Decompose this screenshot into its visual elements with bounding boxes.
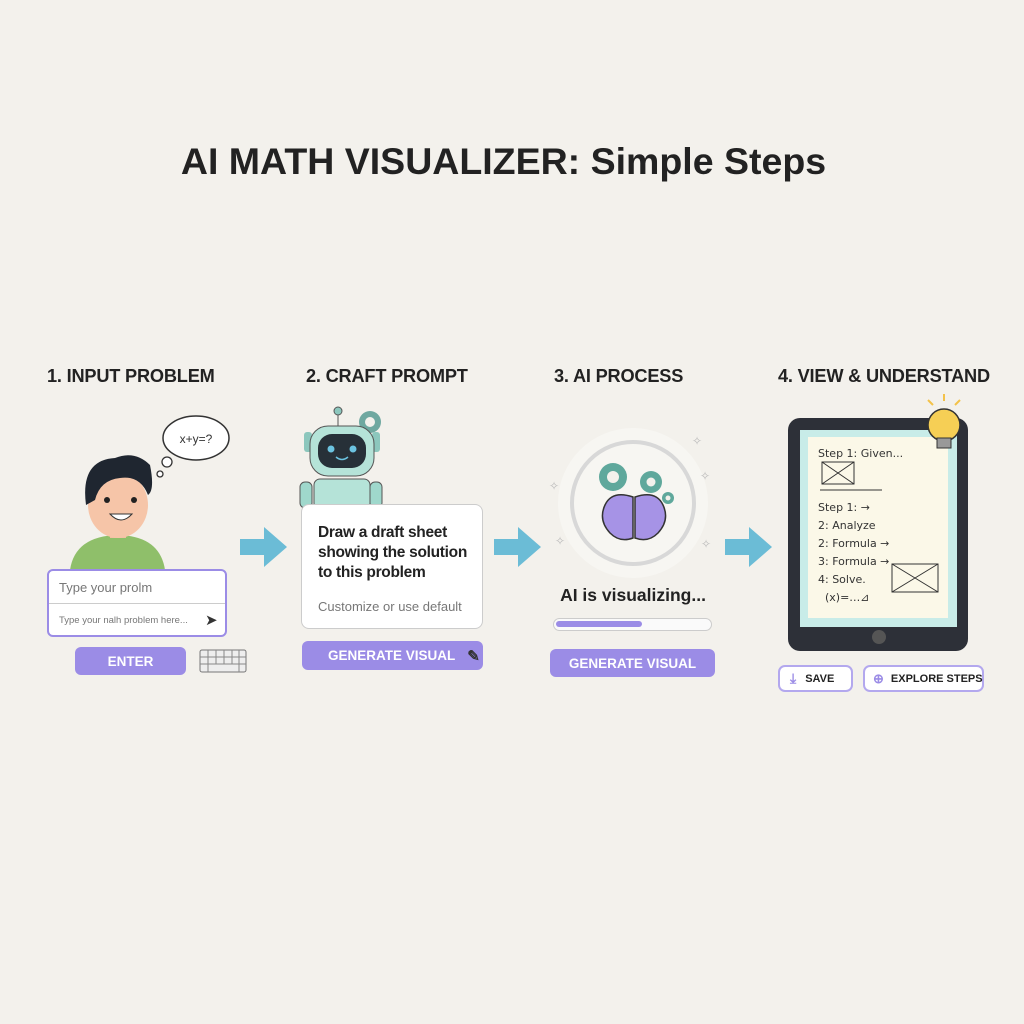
illustration: AI process circle with brain and gears: ✧	[701, 537, 711, 551]
illustration: tablet with solution sheet: (x)=…⊿	[825, 591, 870, 604]
illustration: tablet with solution sheet: 4: Solve.	[818, 573, 866, 586]
button: explore steps: EXPLORE STEPS	[891, 672, 983, 684]
illustration: tablet with solution sheet	[788, 418, 968, 651]
icon: keyboard	[200, 650, 246, 672]
illustration: AI process circle with brain and gears: ✧	[692, 434, 702, 448]
icon: light bulb	[927, 394, 961, 448]
progress bar	[553, 618, 712, 631]
button: save: SAVE	[805, 672, 834, 684]
illustration: AI process circle with brain and gears: ✧	[549, 479, 559, 493]
illustration: person with thought bubble	[70, 415, 230, 569]
button: save: ⤓	[790, 670, 796, 686]
button: explore steps: ⊕	[873, 670, 884, 686]
button: enter: ENTER	[108, 654, 153, 668]
button: generate visual (step 3): GENERATE VISUAL	[569, 656, 696, 670]
input box: ➤	[205, 612, 218, 629]
heading: step 3: 3. AI PROCESS	[554, 366, 683, 386]
input box: Type your nalh problem here...	[59, 615, 188, 626]
button: explore steps	[863, 665, 984, 692]
illustration: tablet with solution sheet: 2: Analyze	[818, 519, 876, 532]
illustration: person with thought bubble: x+y=?	[180, 432, 213, 446]
illustration: tablet with solution sheet: Step 1: Given...	[818, 447, 903, 460]
arrow 2	[494, 527, 541, 567]
button: save	[778, 665, 853, 692]
button: generate visual (step 2): GENERATE VISUAL	[328, 648, 455, 663]
prompt card: showing the solution	[318, 544, 467, 561]
illustration: tablet with solution sheet: 2: Formula →	[818, 537, 889, 550]
title: AI MATH VISUALIZER: Simple Steps	[181, 140, 826, 182]
button: generate visual (step 2): ✎	[467, 648, 480, 664]
button: generate visual (step 2)	[302, 641, 483, 670]
button: generate visual (step 3)	[550, 649, 715, 677]
prompt card: Customize or use default	[318, 599, 462, 614]
illustration: AI process circle with brain and gears	[549, 434, 711, 566]
illustration: robot	[300, 406, 382, 508]
arrow 3	[725, 527, 772, 567]
input box	[47, 569, 227, 637]
button: enter	[75, 647, 186, 675]
prompt card: Draw a draft sheet	[318, 524, 447, 541]
illustration: AI process circle with brain and gears: ✧	[700, 469, 710, 483]
heading: step 2: 2. CRAFT PROMPT	[306, 366, 468, 386]
arrow 1	[240, 527, 287, 567]
heading: step 4: 4. VIEW & UNDERSTAND	[778, 366, 990, 386]
input box: Type your prolm	[59, 580, 152, 595]
heading: step 1: 1. INPUT PROBLEM	[47, 366, 215, 386]
prompt card: to this problem	[318, 564, 425, 581]
status text: AI is visualizing...	[560, 585, 706, 605]
prompt card	[301, 504, 483, 629]
illustration: AI process circle with brain and gears: ✧	[555, 534, 565, 548]
illustration: tablet with solution sheet: Step 1: →	[818, 501, 870, 514]
illustration: tablet with solution sheet: 3: Formula →	[818, 555, 889, 568]
